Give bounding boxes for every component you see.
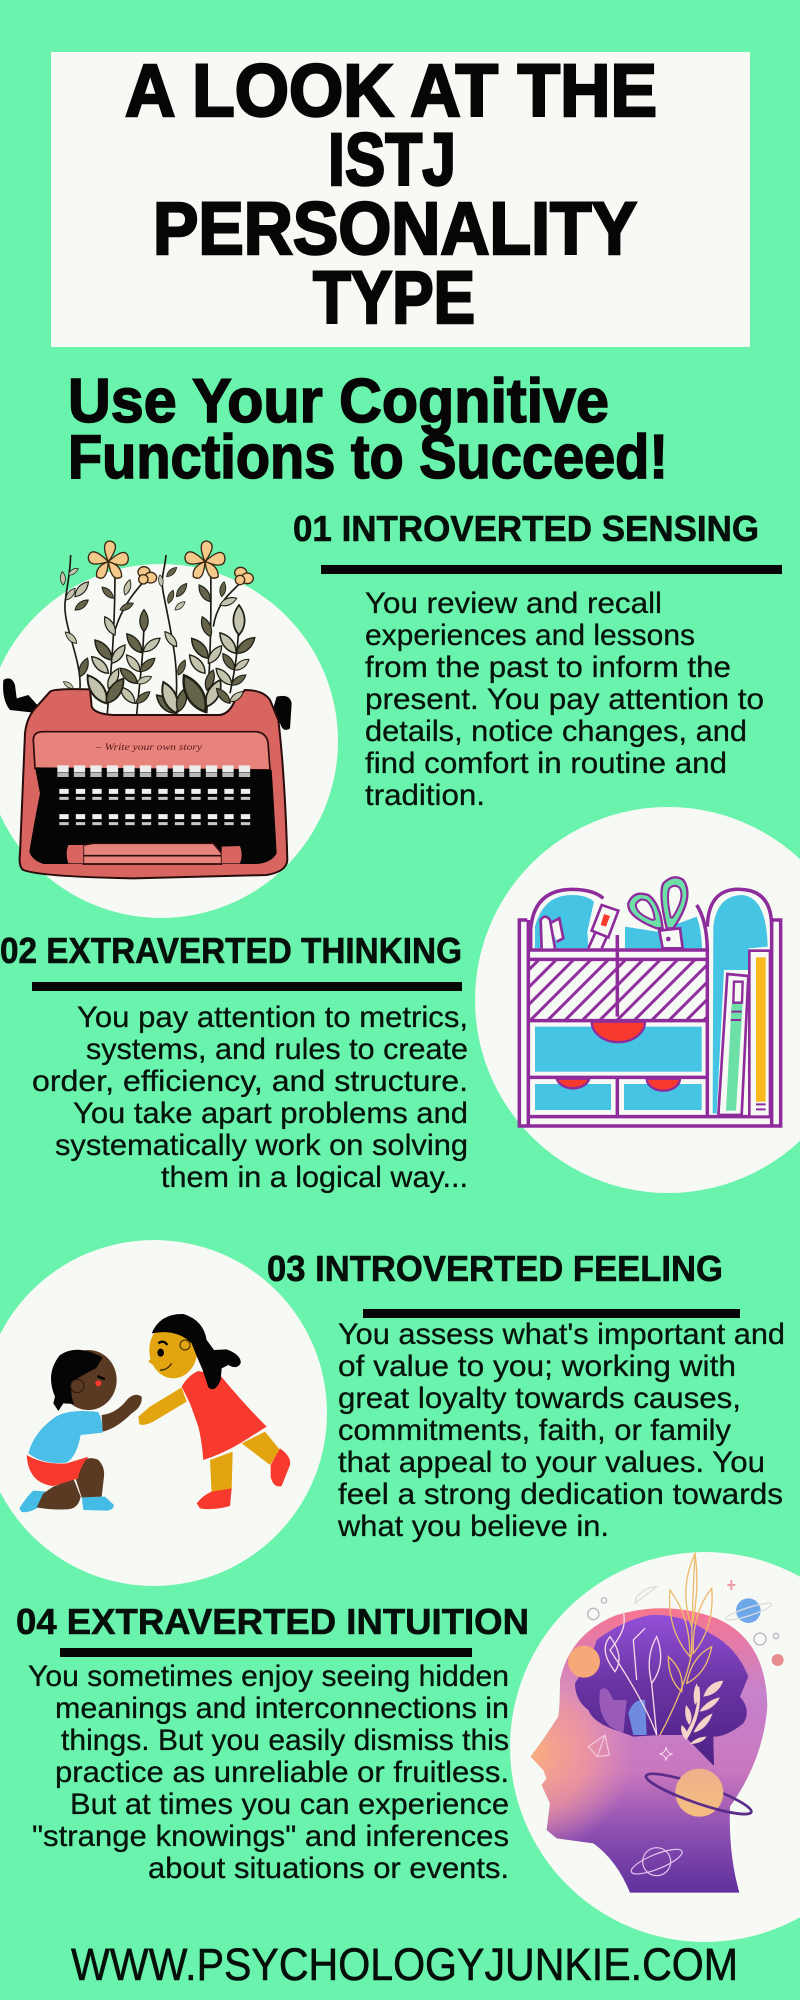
plant shapes	[599, 1688, 627, 1733]
body text 04: But at times you can experience	[70, 1788, 509, 1821]
body text 01: find comfort in routine and	[365, 747, 727, 780]
body text 01: from the past to inform the	[365, 651, 731, 684]
body text 02: systematically work on solving	[55, 1129, 468, 1162]
organizer frame	[519, 889, 781, 1126]
rule 04	[60, 1648, 472, 1657]
body text 03: of value to you; working with	[338, 1350, 736, 1383]
typewriter label: – Write your own story	[95, 742, 203, 753]
flower stems	[65, 555, 240, 715]
body text 01: tradition.	[365, 779, 485, 812]
organizer hatching	[529, 960, 707, 1020]
website footer: WWW.PSYCHOLOGYJUNKIE.COM	[71, 1939, 738, 1990]
panel: 03 introverted feeling	[0, 1240, 785, 1586]
outline planet	[629, 1845, 685, 1879]
title: PERSONALITY	[153, 187, 637, 270]
body text 04: practice as unreliable or fruitless.	[55, 1756, 509, 1789]
body text 04: things. But you easily dismiss this	[61, 1724, 509, 1757]
rule 01	[321, 565, 782, 574]
title panel	[51, 49, 750, 347]
body text 03: You assess what's important and	[338, 1318, 785, 1351]
heading 04: 04 EXTRAVERTED INTUITION	[16, 1601, 529, 1642]
body text 03: that appeal to your values. You	[338, 1446, 765, 1479]
panel: 04 extraverted intuition	[16, 1552, 800, 1942]
title	[125, 49, 657, 339]
body text 04	[28, 1660, 509, 1885]
small orbs	[588, 1598, 779, 1645]
body text 03: what you believe in.	[337, 1510, 609, 1543]
girl	[138, 1314, 290, 1509]
body text 01	[365, 587, 764, 812]
body text 02: You take apart problems and	[73, 1097, 468, 1130]
body text 04: about situations or events.	[148, 1852, 509, 1885]
body text 01: details, notice changes, and	[365, 715, 747, 748]
heading 01: 01 INTROVERTED SENSING	[293, 508, 759, 549]
icon: head with cosmic mind	[531, 1553, 784, 1893]
body text 02: systems, and rules to create	[86, 1033, 468, 1066]
organizer scissors	[628, 877, 687, 948]
heading 03: 03 INTROVERTED FEELING	[267, 1248, 723, 1289]
leaves	[60, 566, 258, 717]
circle backdrop 3	[0, 1240, 327, 1586]
body text 03: commitments, faith, or family	[338, 1414, 731, 1447]
peach moon	[568, 1646, 600, 1678]
organizer ticket	[588, 905, 618, 948]
body text 02: order, efficiency, and structure.	[32, 1065, 468, 1098]
golden plant	[660, 1553, 712, 1735]
body text 03	[337, 1318, 785, 1543]
face glow	[531, 1608, 767, 1893]
body text 03: feel a strong dedication towards	[338, 1478, 783, 1511]
body text 04: You sometimes enjoy seeing hidden	[28, 1660, 509, 1693]
body text 02	[32, 1001, 468, 1194]
body text 02: You pay attention to metrics,	[77, 1001, 468, 1034]
sparkles	[659, 1747, 673, 1761]
panel: 01 introverted sensing	[0, 508, 782, 918]
subtitle	[68, 367, 668, 492]
blue planet	[725, 1598, 773, 1623]
body text 01: experiences and lessons	[365, 619, 695, 652]
icon: typewriter with flowers	[3, 541, 292, 878]
ringed planet	[643, 1767, 754, 1821]
flowers	[88, 541, 253, 585]
body text 04: meanings and interconnections in	[55, 1692, 509, 1725]
body text 01: present. You pay attention to	[365, 683, 764, 716]
heading 02: 02 EXTRAVERTED THINKING	[0, 930, 462, 971]
rule 02	[32, 982, 462, 991]
icon: two children reaching out	[19, 1314, 290, 1512]
leafy sprig	[681, 1681, 723, 1744]
title: A LOOK AT THE	[125, 49, 657, 132]
body text 02: them in a logical way...	[161, 1161, 468, 1194]
head silhouette	[531, 1608, 767, 1893]
subtitle: Use Your Cognitive	[68, 367, 609, 436]
organizer pen	[541, 917, 563, 948]
boy	[19, 1350, 142, 1512]
body text 04: "strange knowings" and inferences	[32, 1820, 509, 1853]
subtitle: Functions to Succeed!	[68, 423, 668, 492]
organizer blue fills	[535, 895, 768, 1113]
title: TYPE	[313, 256, 475, 339]
body text 01: You review and recall	[365, 587, 662, 620]
outline crystal	[588, 1735, 609, 1757]
rule 03	[363, 1309, 740, 1318]
organizer books	[718, 951, 770, 1117]
icon: desk organizer	[519, 877, 781, 1126]
panel: 02 extraverted thinking	[0, 807, 800, 1194]
circle backdrop 2	[475, 807, 800, 1193]
organizer drawer pulls	[557, 1022, 680, 1091]
body text 03: great loyalty towards causes,	[338, 1382, 741, 1415]
circle backdrop 4	[510, 1552, 800, 1942]
typewriter keys	[57, 769, 251, 824]
title: ISTJ	[328, 118, 456, 201]
brain cavity	[575, 1615, 748, 1766]
circle backdrop 1	[0, 564, 338, 918]
